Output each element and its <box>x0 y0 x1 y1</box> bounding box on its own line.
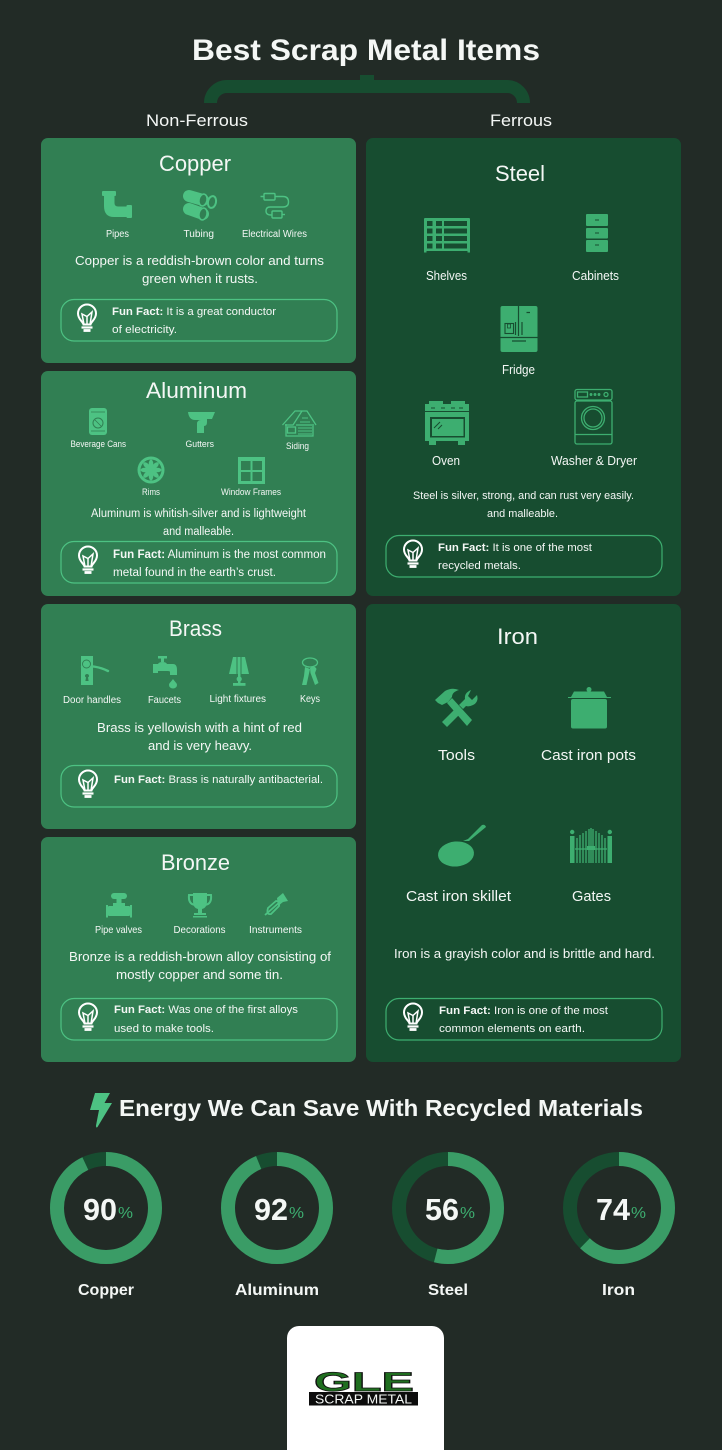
icon: gates <box>570 828 612 863</box>
label: pipe valves: Pipe valves <box>95 925 142 936</box>
description: and is very heavy. <box>148 739 252 753</box>
icon: siding house <box>282 411 316 436</box>
icon: light bulb <box>79 546 97 572</box>
label: gutters: Gutters <box>186 439 214 449</box>
label: tools: Tools <box>438 748 475 764</box>
percent sign: % <box>631 1205 646 1222</box>
fun fact text: of electricity. <box>112 324 177 336</box>
icon: trumpet <box>265 893 288 915</box>
icon: faucet <box>153 656 177 688</box>
iron heading: Iron <box>497 624 538 649</box>
panel: bronze <box>41 837 356 1062</box>
aluminum heading: Aluminum <box>146 378 247 403</box>
callout: fun fact <box>61 300 337 341</box>
label: cast iron skillet: Cast iron skillet <box>406 889 511 905</box>
title: Best Scrap Metal Items <box>192 34 540 67</box>
chart: aluminum donut <box>228 1159 326 1257</box>
fun fact text <box>114 1004 299 1035</box>
description <box>91 508 307 538</box>
bronze heading: Bronze <box>161 850 230 875</box>
callout: fun fact <box>386 536 662 577</box>
icon: gutters <box>188 412 215 433</box>
icon: pipe valve <box>106 893 132 918</box>
panel: aluminum <box>41 371 356 596</box>
fun fact text: Fun Fact: Brass is naturally antibacterial. <box>114 774 323 786</box>
icon: trophy <box>189 893 211 918</box>
icon: light bulb <box>79 770 97 796</box>
label: cast iron pots: Cast iron pots <box>541 748 636 764</box>
icon: tubing <box>189 193 217 221</box>
icon: light bulb <box>79 1004 97 1030</box>
icon: rims <box>138 456 164 484</box>
percent sign: % <box>118 1205 133 1222</box>
label: copper: Copper <box>78 1282 134 1299</box>
icon: shelves <box>424 218 470 252</box>
label: steel: Steel <box>428 1282 468 1299</box>
icon: lightning bolt <box>90 1093 112 1128</box>
fun fact text: recycled metals. <box>438 560 521 572</box>
fun fact text <box>113 549 326 579</box>
logo wordmark: GLE: GLE <box>314 1367 414 1397</box>
bracket connector <box>210 75 524 103</box>
label: door handles: Door handles <box>63 695 121 706</box>
value: 90%: 90 <box>83 1192 117 1227</box>
icon: beverage can <box>89 408 107 435</box>
label: washer and dryer: Washer & Dryer <box>551 454 637 468</box>
icon: cast iron pot <box>568 687 611 728</box>
chart: iron donut <box>570 1159 668 1257</box>
description: and malleable. <box>487 508 558 520</box>
brass heading: Brass <box>169 616 222 641</box>
label: tubing: Tubing <box>184 229 214 240</box>
description: Steel is silver, strong, and can rust very easily. <box>413 490 634 502</box>
label: rims: Rims <box>142 487 160 497</box>
label: faucets: Faucets <box>148 695 181 706</box>
fun fact text: Fun Fact: Aluminum is the most common <box>113 549 326 561</box>
fun fact text: Fun Fact: Was one of the first alloys <box>114 1004 299 1016</box>
description: Brass is yellowish with a hint of red <box>97 721 302 735</box>
fun fact text <box>438 542 592 572</box>
icon: cabinets <box>586 214 608 252</box>
description <box>69 949 331 982</box>
label: instruments: Instruments <box>249 925 302 936</box>
icon: light bulb <box>404 540 422 566</box>
description: and malleable. <box>163 526 234 538</box>
fun fact text: Fun Fact: It is a great conductor <box>112 306 276 318</box>
fun fact text: used to make tools. <box>114 1023 214 1035</box>
icon: electrical wires <box>260 194 288 218</box>
label: fridge: Fridge <box>502 363 535 377</box>
percent sign: % <box>289 1205 304 1222</box>
logo bar: scrap metal <box>309 1392 418 1406</box>
fun fact text <box>112 306 276 336</box>
label: shelves: Shelves <box>426 269 467 283</box>
icon: washer and dryer <box>575 390 612 444</box>
fun fact text: common elements on earth. <box>439 1023 585 1035</box>
label: light fixtures: Light fixtures <box>210 694 266 705</box>
label: decorations: Decorations <box>174 925 226 936</box>
label: siding: Siding <box>286 441 309 451</box>
panel: copper <box>41 138 356 363</box>
description: mostly copper and some tin. <box>116 967 283 982</box>
callout: fun fact <box>61 542 337 583</box>
percent sign: % <box>460 1205 475 1222</box>
description: Copper is a reddish-brown color and turns <box>75 253 325 268</box>
fun fact text <box>439 1005 608 1035</box>
description <box>97 721 302 753</box>
description: Bronze is a reddish-brown alloy consisting of <box>69 949 331 964</box>
energy heading: Energy We Can Save With Recycled Materials <box>119 1095 643 1121</box>
fun fact text: Fun Fact: It is one of the most <box>438 542 592 554</box>
logo subtitle: SCRAP METAL <box>315 1392 412 1406</box>
value: 56%: 56 <box>425 1192 459 1227</box>
heading: non-ferrous: Non-Ferrous <box>146 111 248 130</box>
heading: ferrous: Ferrous <box>490 111 552 130</box>
description: green when it rusts. <box>142 271 258 286</box>
label: gates: Gates <box>572 889 611 905</box>
description: Aluminum is whitish-silver and is lightweight <box>91 508 307 520</box>
panel: iron <box>366 604 681 1062</box>
icon: light bulb <box>78 304 96 330</box>
icon: tools <box>435 689 478 727</box>
label: window frames: Window Frames <box>221 487 281 497</box>
icon: keys <box>302 658 318 685</box>
callout: fun fact <box>61 766 337 807</box>
panel: steel <box>366 138 681 596</box>
label: iron: Iron <box>602 1282 635 1299</box>
logo card <box>287 1326 444 1450</box>
icon: window frame <box>238 457 265 484</box>
description: Iron is a grayish color and is brittle and hard. <box>394 946 655 961</box>
fun fact text: metal found in the earth’s crust. <box>113 567 276 579</box>
chart: copper donut <box>57 1159 155 1257</box>
label: electrical wires: Electrical Wires <box>242 229 307 240</box>
icon: oven <box>425 401 469 445</box>
callout: fun fact <box>61 998 337 1040</box>
icon: door handle <box>81 656 108 685</box>
description <box>413 490 634 520</box>
callout: fun fact <box>386 998 662 1040</box>
label: aluminum: Aluminum <box>235 1282 319 1299</box>
icon: light bulb <box>404 1004 422 1030</box>
icon: pipes <box>102 191 132 218</box>
icon: light fixture <box>229 657 249 686</box>
value: 74%: 74 <box>596 1192 631 1227</box>
label: pipes: Pipes <box>106 229 129 240</box>
icon: fridge <box>500 306 538 352</box>
value: 92%: 92 <box>254 1192 288 1227</box>
label: keys: Keys <box>300 694 320 705</box>
label: oven: Oven <box>432 454 460 468</box>
steel heading: Steel <box>495 161 545 186</box>
copper heading: Copper <box>159 151 231 176</box>
label: cabinets: Cabinets <box>572 269 619 283</box>
chart: steel donut <box>399 1159 497 1257</box>
icon: cast iron skillet <box>437 825 486 868</box>
description <box>75 253 325 286</box>
label: beverage cans: Beverage Cans <box>70 439 126 449</box>
fun fact text: Fun Fact: Iron is one of the most <box>439 1005 608 1017</box>
panel: brass <box>41 604 356 829</box>
